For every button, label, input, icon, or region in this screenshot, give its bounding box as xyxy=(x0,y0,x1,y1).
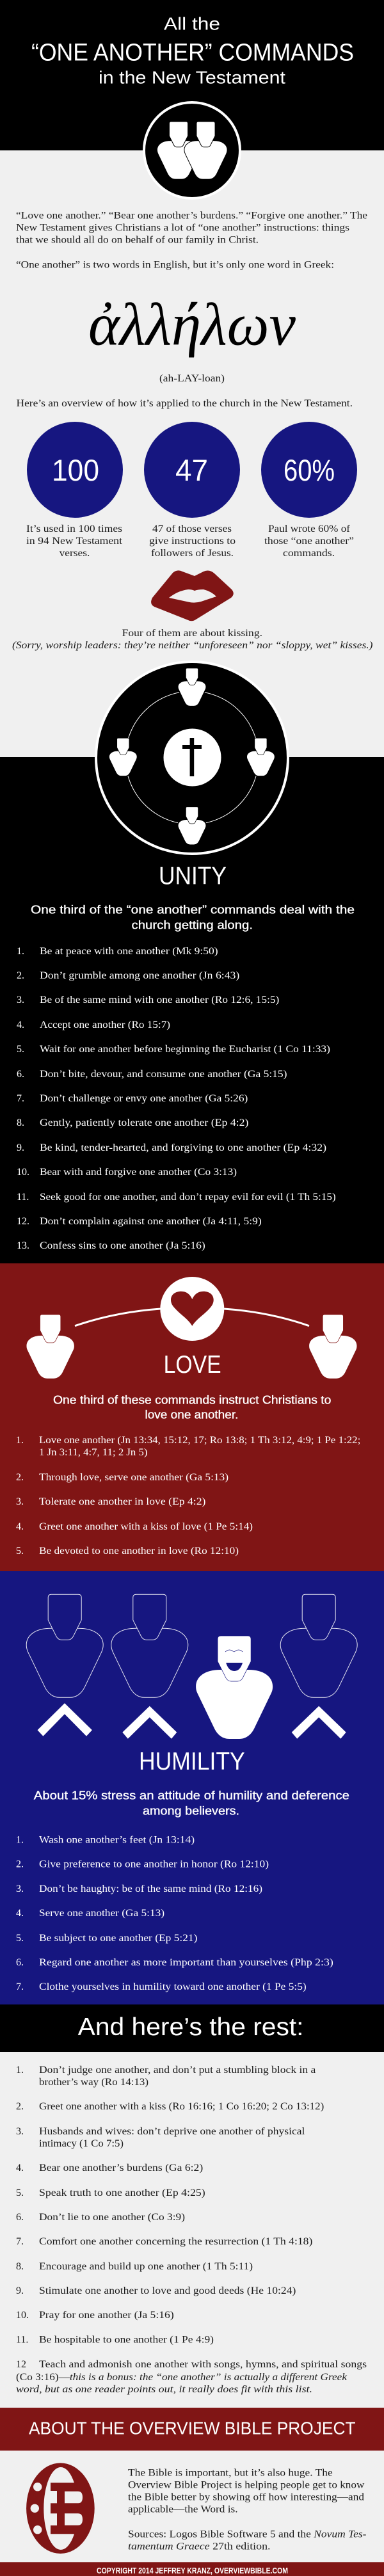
text block: intro paragraph: that we should all do on behalf of our family in Christ. xyxy=(16,235,259,246)
list: love commands: Tolerate one another in love (Ep 4:2) xyxy=(39,1496,205,1507)
text block: sources: Sources: Logos Bible Software 5 and the Novum Tes- xyxy=(128,2529,366,2540)
list: humility commands xyxy=(16,1834,333,1992)
list: remaining commands: Be hospitable to one another (1 Pe 4:9) xyxy=(39,2335,214,2346)
list: remaining commands: 1. xyxy=(16,2065,24,2076)
list: unity commands: 13. xyxy=(17,1240,29,1251)
stat: 60% xyxy=(261,422,357,559)
title: “ONE ANOTHER” COMMANDS xyxy=(31,39,354,66)
list: unity commands: Be of the same mind with one another (Ro 12:6, 15:5) xyxy=(40,995,279,1005)
icon: outlined person 3 with chevron xyxy=(280,1594,357,1739)
list: unity commands: 2. xyxy=(17,970,24,981)
list: unity commands: Don’t bite, devour, and consume one another (Ga 5:15) xyxy=(40,1069,287,1080)
list: unity commands xyxy=(17,946,336,1251)
icon: two people in circle xyxy=(144,102,240,198)
list: humility commands: Serve one another (Ga 5:13) xyxy=(39,1908,164,1919)
list: love commands: 5. xyxy=(16,1546,24,1556)
icon: outlined person 1 with chevron xyxy=(26,1594,103,1736)
stat: 100: 100 xyxy=(52,453,99,487)
list: remaining commands xyxy=(16,2065,367,2395)
panel: about banner: ABOUT THE OVERVIEW BIBLE PROJECT xyxy=(29,2418,356,2438)
subheading: humility xyxy=(34,1789,349,1818)
list: humility commands: Clothe yourselves in humility toward one another (1 Pe 5:5) xyxy=(39,1981,307,1992)
stat: 100 xyxy=(26,422,123,559)
list: unity commands: 3. xyxy=(17,995,24,1005)
panel: the rest xyxy=(0,2052,384,2408)
panel: about banner xyxy=(0,2408,384,2451)
stat: 47: followers of Jesus. xyxy=(151,548,234,559)
list: unity commands: 4. xyxy=(17,1020,24,1030)
stat: 47: 47 of those verses xyxy=(152,524,232,534)
list: humility commands: 5. xyxy=(16,1933,24,1944)
icon: overview bible logo xyxy=(26,2463,95,2554)
list: unity commands: Be kind, tender-hearted, and forgiving to one another (Ep 4:32) xyxy=(40,1142,326,1153)
panel: header xyxy=(0,0,384,150)
list: remaining commands: Teach and admonish one another with songs, hymns, and spiritual songs xyxy=(39,2359,367,2370)
list: unity commands: Wait for one another before beginning the Eucharist (1 Co 11:33) xyxy=(40,1044,330,1055)
heading: unity: UNITY xyxy=(159,863,227,890)
list: unity commands: Gently, patiently tolerate one another (Ep 4:2) xyxy=(40,1117,248,1128)
panel: unity xyxy=(0,662,384,1263)
list: love commands: Be devoted to one another in love (Ro 12:10) xyxy=(39,1546,239,1556)
list: unity commands: Don’t complain against one another (Ja 4:11, 5:9) xyxy=(40,1216,262,1227)
text block: sources: tamentum Graece 27th edition. xyxy=(128,2541,270,2552)
list: unity commands: 12. xyxy=(17,1216,29,1227)
list: humility commands: Don’t be haughty: be of the same mind (Ro 12:16) xyxy=(39,1884,262,1894)
subheading: unity xyxy=(31,903,355,932)
subheading: humility: among believers. xyxy=(143,1804,239,1818)
panel: and here's the rest banner: And here’s the rest: xyxy=(78,2013,303,2041)
text block: kissing note xyxy=(12,628,372,651)
subheading: unity: One third of the “one another” commands deal with the xyxy=(31,903,355,916)
text block: kissing note: Four of them are about kissing. xyxy=(122,628,262,639)
stat: 60%: commands. xyxy=(283,548,335,559)
stat: 60%: Paul wrote 60% of xyxy=(268,524,351,534)
list: love commands: Greet one another with a kiss of love (1 Pe 5:14) xyxy=(39,1521,253,1532)
stat: 47: give instructions to xyxy=(149,536,236,547)
list: love commands xyxy=(16,1435,360,1556)
list: remaining commands: Bear one another’s burdens (Ga 6:2) xyxy=(39,2163,203,2173)
text block: about the project: The Bible is important, but it’s also huge. The xyxy=(128,2467,333,2478)
list: love commands: 4. xyxy=(16,1521,24,1532)
stat: 60%: 60% xyxy=(284,453,335,487)
list: unity commands: Seek good for one another, and don’t repay evil for evil (1 Th 5:15) xyxy=(40,1192,336,1203)
list: humility commands: 6. xyxy=(16,1957,24,1968)
text block: intro paragraph: New Testament gives Christians a lot of “one another” instructions: things xyxy=(16,223,349,234)
text block: about the project xyxy=(128,2467,365,2515)
panel: about xyxy=(0,2451,384,2562)
list: remaining commands: Stimulate one another to love and good deeds (He 10:24) xyxy=(39,2285,296,2296)
text block: about the project: applicable—the Word is. xyxy=(128,2504,238,2515)
list: love commands: 1. xyxy=(16,1435,24,1446)
icon: people circled around cross xyxy=(96,662,288,854)
list: humility commands: Regard one another as more important than yourselves (Php 2:3) xyxy=(39,1957,333,1968)
list: unity commands: Bear with and forgive one another (Co 3:13) xyxy=(40,1167,237,1178)
list: remaining commands: 6. xyxy=(16,2212,24,2223)
stat: 100: in 94 New Testament xyxy=(26,536,123,547)
subheading: unity: church getting along. xyxy=(132,918,253,932)
text block: intro paragraph: “Love one another.” “Bear one another’s burdens.” “Forgive one another.” The xyxy=(16,211,367,221)
subheading: love: love one another. xyxy=(145,1408,238,1421)
text block: about the project: Overview Bible Project is helping people get to know xyxy=(128,2479,365,2490)
list: unity commands: Don’t challenge or envy one another (Ga 5:26) xyxy=(40,1093,248,1104)
panel: love xyxy=(0,1263,384,1571)
greek word: ἀλλήλων xyxy=(88,291,296,358)
list: unity commands: 1. xyxy=(17,946,24,957)
heading: humility: HUMILITY xyxy=(139,1748,245,1775)
list: love commands: Love one another (Jn 13:34, 15:12, 17; Ro 13:8; 1 Th 3:12, 4:9; 1 Pe 1:22; xyxy=(39,1435,360,1446)
icon: two people and heart xyxy=(26,1277,356,1379)
list: unity commands: 10. xyxy=(17,1167,29,1178)
list: remaining commands: (Co 3:16)— this is a bonus: the “one another” is actually a different Greek xyxy=(16,2372,348,2383)
panel: footer xyxy=(0,2562,384,2576)
list: unity commands: 9. xyxy=(17,1142,24,1153)
stat: 47: 47 xyxy=(175,453,208,487)
stat: 100: verses. xyxy=(60,548,90,559)
subheading: humility: About 15% stress an attitude of humility and deference xyxy=(34,1789,349,1802)
subheading: love xyxy=(53,1393,331,1421)
list: remaining commands: 5. xyxy=(16,2188,24,2198)
list: humility commands: 3. xyxy=(16,1884,24,1894)
list: unity commands: 11. xyxy=(17,1192,29,1203)
list: remaining commands: Husbands and wives: don’t deprive one another of physical xyxy=(39,2126,305,2137)
stat: 47 xyxy=(144,422,240,559)
list: remaining commands: Greet one another with a kiss (Ro 16:16; 1 Co 16:20; 2 Co 13:12) xyxy=(39,2101,324,2112)
text block: overview line: Here’s an overview of how it’s applied to the church in the New Testament. xyxy=(17,398,353,409)
stat: 60%: those “one another” xyxy=(264,536,354,547)
list: humility commands: 4. xyxy=(16,1908,24,1919)
list: unity commands: 5. xyxy=(17,1044,24,1055)
panel: and here's the rest banner xyxy=(0,2004,384,2052)
list: remaining commands: 3. xyxy=(16,2126,24,2137)
list: unity commands: 6. xyxy=(17,1069,24,1080)
list: remaining commands: 10. xyxy=(16,2310,29,2321)
title xyxy=(31,14,354,88)
list: remaining commands: 8. xyxy=(16,2261,24,2272)
list: love commands: 1 Jn 3:11, 4:7, 11; 2 Jn 5) xyxy=(39,1447,147,1458)
list: humility commands: Wash one another’s feet (Jn 13:14) xyxy=(39,1834,195,1845)
list: remaining commands: word, but as one reader points out, it really does fit with this list. xyxy=(16,2384,312,2395)
heading: love: LOVE xyxy=(164,1351,221,1379)
list: remaining commands: brother’s way (Ro 14:13) xyxy=(39,2077,148,2088)
list: remaining commands: intimacy (1 Co 7:5) xyxy=(39,2138,124,2149)
list: unity commands: Accept one another (Ro 15:7) xyxy=(40,1020,170,1030)
list: unity commands: 7. xyxy=(17,1093,24,1104)
list: remaining commands: Don’t judge one another, and don’t put a stumbling block in a xyxy=(39,2065,316,2076)
stat: 100: It’s used in 100 times xyxy=(26,524,122,534)
list: humility commands: Give preference to one another in honor (Ro 12:10) xyxy=(39,1859,269,1869)
list: unity commands: Confess sins to one another (Ja 5:16) xyxy=(40,1240,205,1251)
list: remaining commands: Encourage and build up one another (1 Th 5:11) xyxy=(39,2261,253,2272)
icon: lips xyxy=(151,570,234,621)
list: remaining commands: 11. xyxy=(16,2335,28,2346)
list: remaining commands: 9. xyxy=(16,2285,24,2296)
panel: intro background xyxy=(0,150,384,757)
pronunciation: (ah-LAY-loan) xyxy=(159,373,225,384)
text block: kissing note: (Sorry, worship leaders: they’re neither “unforeseen” nor “sloppy, wet” kisses.) xyxy=(12,640,372,651)
list: humility commands: 1. xyxy=(16,1834,24,1845)
text block: one word in Greek: “One another” is two words in English, but it’s only one word in Greek: xyxy=(16,259,334,270)
title: in the New Testament xyxy=(99,68,285,88)
title: All the xyxy=(164,14,220,34)
text block: sources xyxy=(128,2529,366,2552)
list: remaining commands: 7. xyxy=(16,2236,24,2247)
list: remaining commands: Don’t lie to one another (Co 3:9) xyxy=(39,2212,185,2223)
list: humility commands: Be subject to one another (Ep 5:21) xyxy=(39,1933,197,1944)
panel: humility xyxy=(0,1571,384,2004)
list: remaining commands: 4. xyxy=(16,2163,24,2173)
list: love commands: 2. xyxy=(16,1472,24,1483)
list: unity commands: Be at peace with one another (Mk 9:50) xyxy=(40,946,218,957)
text block: about the project: the Bible better by showing off how interesting—and xyxy=(128,2492,364,2502)
list: unity commands: Don’t grumble among one another (Jn 6:43) xyxy=(40,970,239,981)
list: remaining commands: Comfort one another concerning the resurrection (1 Th 4:18) xyxy=(39,2236,312,2247)
text block: intro paragraph xyxy=(16,211,367,246)
list: humility commands: 2. xyxy=(16,1859,24,1869)
list: remaining commands: 2. xyxy=(16,2101,24,2112)
subheading: love: One third of these commands instruct Christians to xyxy=(53,1393,331,1406)
list: humility commands: 7. xyxy=(16,1981,24,1992)
list: unity commands: 8. xyxy=(17,1117,24,1128)
list: love commands: Through love, serve one another (Ga 5:13) xyxy=(39,1472,228,1483)
list: love commands: 3. xyxy=(16,1496,24,1507)
panel: footer: COPYRIGHT 2014 JEFFREY KRANZ, OVERVIEWBIBLE.COM xyxy=(97,2566,288,2575)
icon: smiling person xyxy=(196,1636,273,1739)
icon: outlined person 2 with chevron xyxy=(111,1594,188,1739)
list: remaining commands: 12 xyxy=(16,2359,26,2370)
list: remaining commands: Speak truth to one another (Ep 4:25) xyxy=(39,2188,205,2198)
list: remaining commands: Pray for one another (Ja 5:16) xyxy=(39,2310,174,2321)
